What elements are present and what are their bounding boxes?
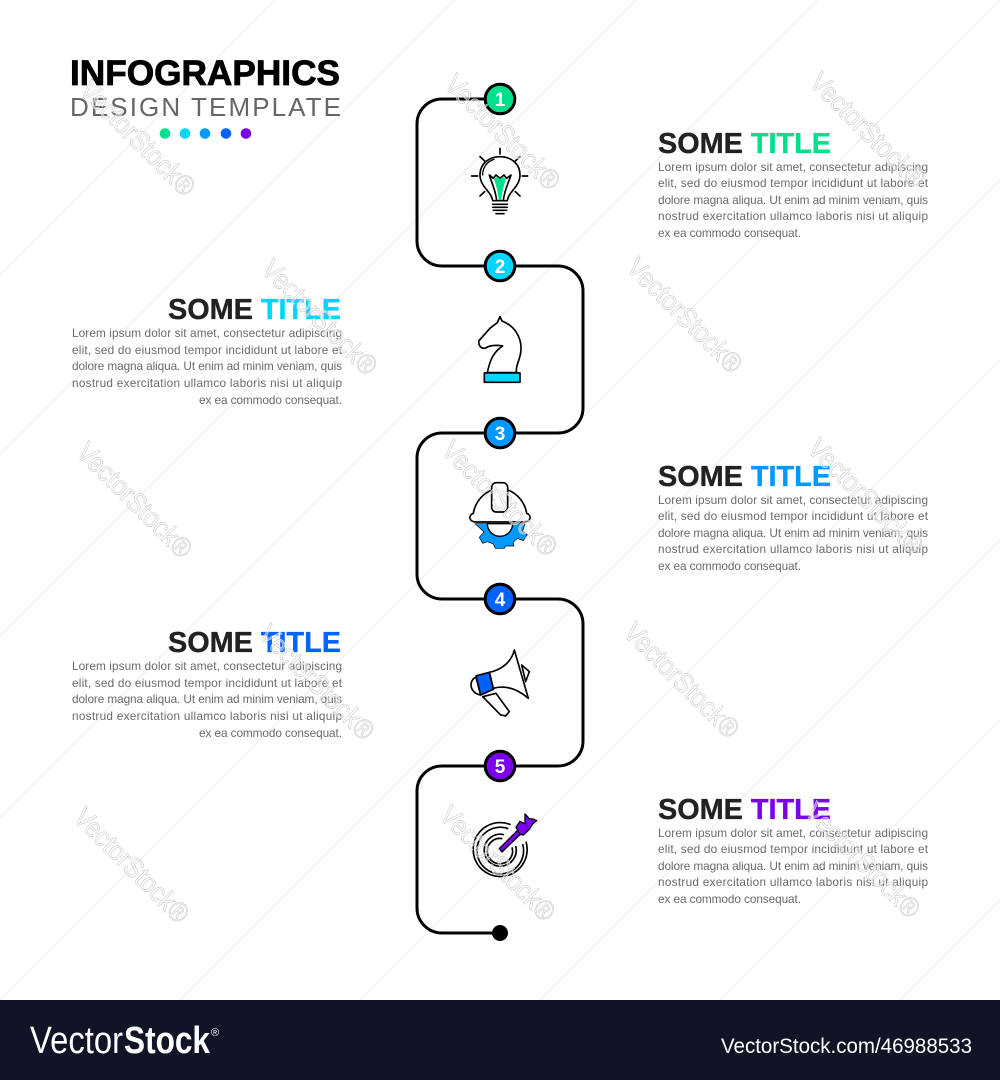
body copy: step 5: dolore magna aliqua. Ut enim ad minim veniam, quis: [658, 859, 928, 873]
step marker 2: [485, 251, 515, 281]
watermark pattern: VectorStock®: [256, 253, 384, 382]
step marker 4: 4: [495, 590, 506, 611]
body copy: step 4: nostrud exercitation ullamco laboris nisi ut aliquip: [72, 709, 342, 723]
body copy: step 5: ex ea commodo consequat.: [658, 892, 801, 906]
body copy: step 2: Lorem ipsum dolor sit amet, consectetur adipiscing: [72, 326, 342, 340]
body copy: step 1: dolore magna aliqua. Ut enim ad minim veniam, quis: [658, 193, 928, 207]
footer logo: [30, 1020, 219, 1062]
watermark pattern: VectorStock®: [74, 74, 202, 203]
body copy: step 2: nostrud exercitation ullamco laboris nisi ut aliquip: [72, 376, 342, 390]
step marker 4: [485, 584, 515, 614]
body copy: step 5: [658, 826, 929, 906]
step marker 2: 2: [495, 257, 505, 278]
step marker 5: [485, 751, 515, 781]
watermark pattern: VectorStock®: [439, 68, 567, 197]
title block: [70, 54, 341, 139]
body copy: step 5: Lorem ipsum dolor sit amet, consectetur adipiscing: [658, 826, 928, 840]
heading: infographics: INFOGRAPHICS: [70, 54, 340, 93]
heading: step 5: SOME TITLE: [658, 794, 831, 826]
heading: step 2: SOME TITLE: [168, 294, 341, 326]
heading: step 1: SOME TITLE: [658, 128, 831, 160]
body copy: step 5: nostrud exercitation ullamco laboris nisi ut aliquip: [658, 875, 928, 889]
body copy: step 2: [72, 326, 343, 407]
icon: megaphone: [471, 650, 529, 716]
palette dots: [160, 128, 251, 139]
watermark pattern: VectorStock®: [436, 434, 564, 563]
watermark pattern: VectorStock®: [804, 66, 932, 195]
body copy: step 2: dolore magna aliqua. Ut enim ad minim veniam, quis: [72, 359, 342, 373]
step marker 3: 3: [495, 424, 505, 445]
step marker 3: [485, 418, 515, 448]
step marker 5: 5: [495, 757, 506, 778]
body copy: step 3: Lorem ipsum dolor sit amet, consectetur adipiscing: [658, 493, 928, 507]
footer logo: Vector: [30, 1020, 123, 1062]
icon: target with arrow: [473, 814, 537, 877]
watermark pattern: VectorStock®: [799, 796, 927, 925]
panel: step 3 text: [658, 461, 929, 573]
step marker 1: 1: [495, 90, 506, 111]
body copy: step 4: [72, 659, 343, 740]
panel: step 1 text: [658, 128, 929, 240]
panel: step 5 text: [658, 794, 929, 906]
body copy: step 5: elit, sed do eiusmod tempor incididunt ut labore et: [658, 842, 929, 856]
body copy: step 1: nostrud exercitation ullamco laboris nisi ut aliquip: [658, 209, 928, 223]
panel: step 4 text: [72, 627, 343, 740]
watermark pattern: VectorStock®: [621, 251, 749, 380]
watermark pattern: VectorStock®: [71, 436, 199, 565]
heading: step 4: SOME TITLE: [168, 627, 341, 659]
body copy: step 4: Lorem ipsum dolor sit amet, consectetur adipiscing: [72, 659, 342, 673]
winding timeline path: [417, 99, 583, 933]
icon: hard hat and gear: [470, 483, 530, 548]
body copy: step 4: dolore magna aliqua. Ut enim ad minim veniam, quis: [72, 692, 342, 706]
body copy: step 1: elit, sed do eiusmod tempor incididunt ut labore et: [658, 176, 929, 190]
body copy: step 3: dolore magna aliqua. Ut enim ad minim veniam, quis: [658, 526, 928, 540]
watermark pattern: [68, 66, 932, 930]
watermark pattern: VectorStock®: [68, 801, 196, 930]
body copy: step 1: [658, 160, 929, 240]
watermark pattern: VectorStock®: [434, 799, 562, 928]
footer logo: Stock: [124, 1020, 211, 1062]
footer image id: VectorStock.com/46988533: [721, 1035, 972, 1058]
panel: step 2 text: [72, 294, 343, 407]
body copy: step 2: elit, sed do eiusmod tempor incididunt ut labore et: [72, 343, 343, 357]
footer logo: ®: [211, 1027, 219, 1039]
timeline end dot: [492, 925, 508, 941]
subheading: design template: DESIGN TEMPLATE: [70, 92, 341, 122]
heading: step 3: SOME TITLE: [658, 461, 831, 493]
icon: light bulb with pencil tip: [472, 148, 528, 214]
body copy: step 3: elit, sed do eiusmod tempor incididunt ut labore et: [658, 509, 929, 523]
body copy: step 3: [658, 493, 929, 573]
icon: chess knight: [479, 317, 521, 382]
body copy: step 3: nostrud exercitation ullamco laboris nisi ut aliquip: [658, 542, 928, 556]
step marker 1: [485, 84, 515, 114]
body copy: step 4: elit, sed do eiusmod tempor incididunt ut labore et: [72, 676, 343, 690]
watermark pattern: VectorStock®: [253, 618, 381, 747]
watermark pattern: VectorStock®: [618, 616, 746, 745]
body copy: step 4: ex ea commodo consequat.: [199, 726, 342, 740]
body copy: step 3: ex ea commodo consequat.: [658, 559, 801, 573]
body copy: step 1: Lorem ipsum dolor sit amet, consectetur adipiscing: [658, 160, 928, 174]
body copy: step 1: ex ea commodo consequat.: [658, 226, 801, 240]
watermark pattern: VectorStock®: [802, 432, 930, 561]
footer bar: [0, 1000, 1000, 1080]
body copy: step 2: ex ea commodo consequat.: [199, 393, 342, 407]
